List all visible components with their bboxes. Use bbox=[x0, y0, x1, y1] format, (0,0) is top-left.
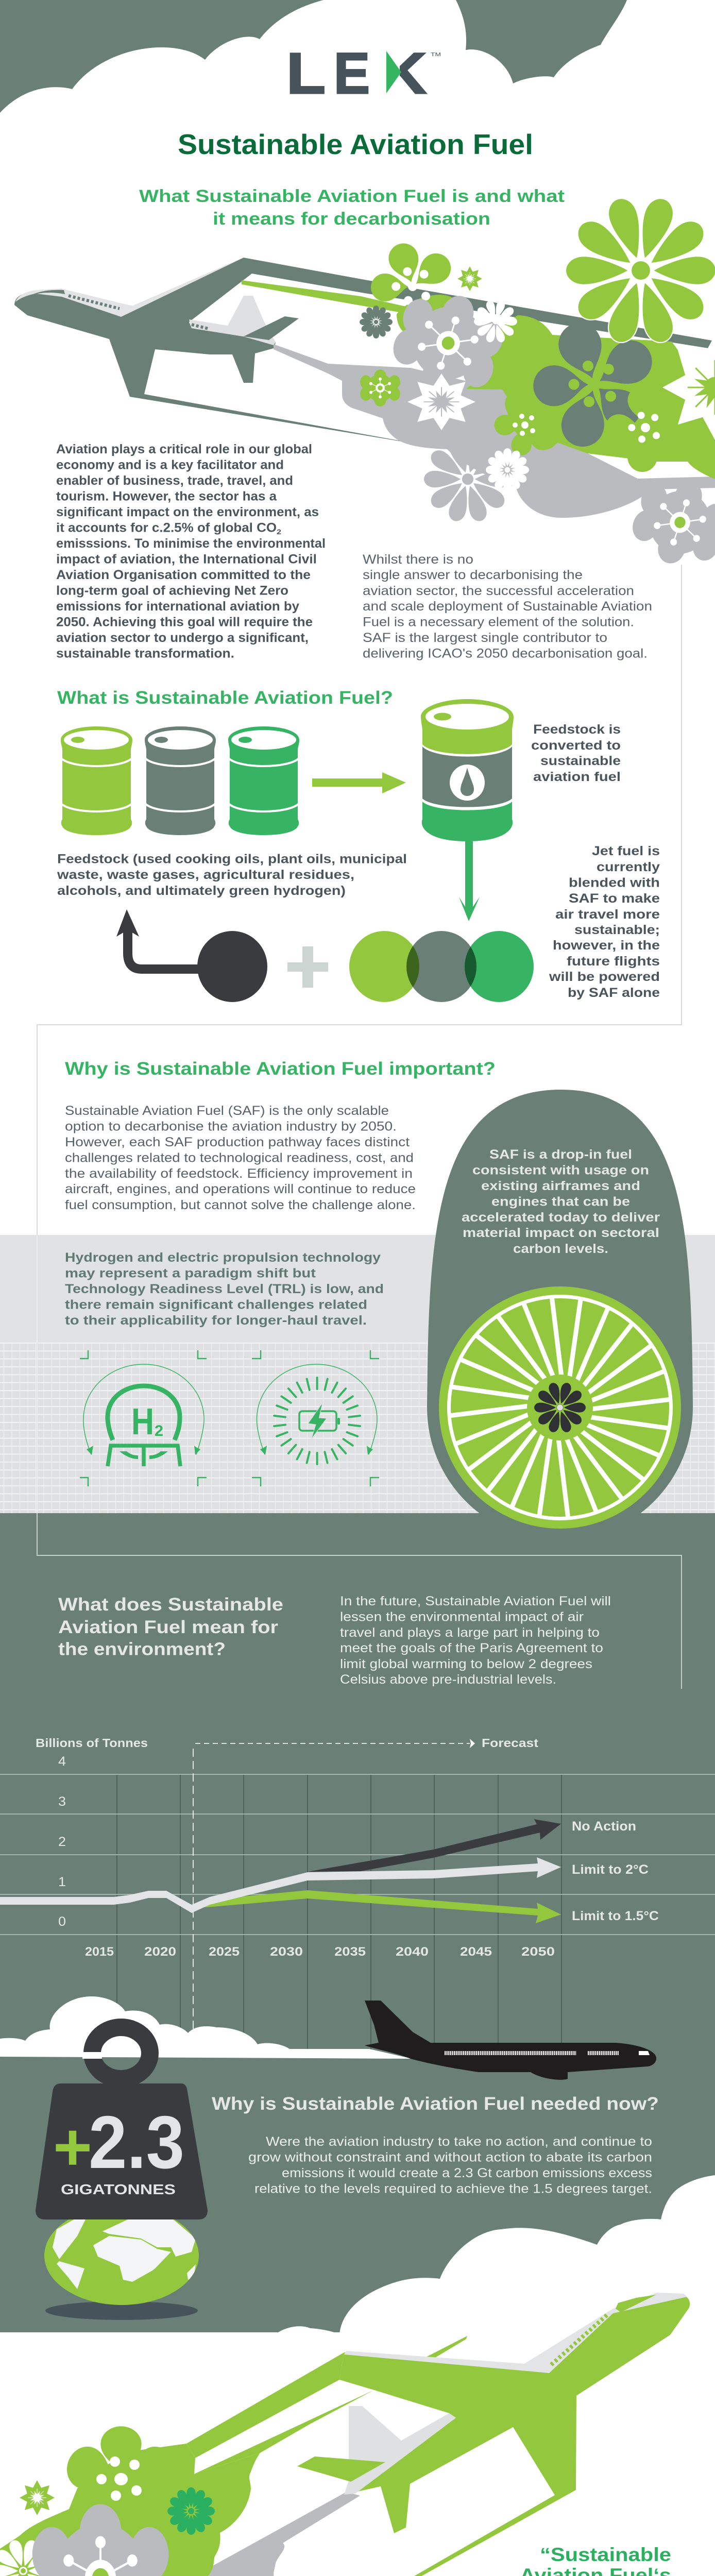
text: feedstock is converted bbox=[531, 722, 621, 784]
text block: intro left: 2 bbox=[277, 528, 281, 536]
battery circular arrows bbox=[257, 1364, 377, 1454]
icon: three feedstock barrels bbox=[61, 726, 299, 835]
chart x labels bbox=[85, 1945, 555, 1959]
plane stabiliser bbox=[297, 2456, 385, 2482]
frame line in green section bbox=[37, 1513, 682, 1689]
text: jet fuel: by SAF alone bbox=[568, 986, 660, 1000]
icon: weight and globe bbox=[36, 2027, 208, 2320]
dome text: SAF is a drop-in fuel bbox=[489, 1147, 632, 1162]
text block: environment: In the future, Sustainable Aviation Fuel will bbox=[340, 1594, 611, 1608]
chart x labels: 2035 bbox=[334, 1945, 366, 1959]
text block: intro left: long-term goal of achieving Net Zero bbox=[56, 583, 288, 598]
text block: why important: the availability of feedstock. Efficiency improvement in bbox=[65, 1166, 413, 1181]
globe shadow bbox=[45, 2301, 198, 2320]
chart forecast divider bbox=[193, 1749, 194, 2032]
text block: intro left: impact of aviation, the International Civil bbox=[56, 552, 317, 567]
text: jet fuel: blended with bbox=[569, 876, 660, 890]
engine outer ring bbox=[427, 1275, 693, 1540]
hydrogen stand bbox=[108, 1446, 180, 1466]
logo: LEK: TM bbox=[431, 52, 441, 58]
chart y labels: 1 bbox=[58, 1875, 66, 1889]
engine fan bbox=[439, 1286, 681, 1529]
plane cockpit bbox=[616, 2295, 656, 2312]
text block: intro left: enabler of business, trade, travel, and bbox=[56, 473, 293, 488]
text block: intro left: 2050. Achieving this goal will require the bbox=[56, 615, 313, 630]
text block: why important: However, each SAF production pathway faces distinct bbox=[65, 1135, 410, 1149]
flower: white grey daisy bbox=[486, 448, 529, 492]
subtitle: What Sustainable Aviation Fuel is and what bbox=[139, 187, 565, 206]
panel: dark green lower section bbox=[0, 1513, 715, 2332]
heading: why needed now: Why is Sustainable Aviation Fuel needed now? bbox=[212, 2094, 659, 2114]
battery ring of ticks bbox=[274, 1378, 360, 1464]
flower: lime clover upper left bbox=[370, 240, 457, 305]
plane main body bbox=[187, 2297, 690, 2576]
flower: grey daisy bbox=[424, 435, 512, 523]
plane tail fin bbox=[344, 2406, 456, 2495]
text: feedstock list: alcohols, and ultimately green hydrogen) bbox=[57, 884, 346, 898]
chart x labels: 2025 bbox=[209, 1945, 240, 1959]
text block: environment bbox=[340, 1594, 611, 1687]
chart vertical grid bbox=[117, 1774, 561, 2053]
weight block bbox=[36, 2083, 208, 2219]
quote: “Sustainable bbox=[540, 2544, 671, 2565]
flower: large white star bbox=[662, 335, 715, 440]
weight figure: GIGATONNES bbox=[61, 2181, 176, 2197]
grey cloud bbox=[274, 344, 715, 518]
chart labels bbox=[572, 1819, 659, 1923]
lime cloud lower bbox=[0, 2444, 260, 2576]
section frame line bbox=[37, 565, 682, 1689]
text block: intro left: Aviation plays a critical role in our global bbox=[56, 442, 312, 456]
text block: hydrogen bbox=[65, 1250, 384, 1328]
weight figure bbox=[53, 2100, 184, 2197]
flower: top lime clover bbox=[61, 2426, 181, 2501]
text block: intro right: SAF is the largest single contributor to bbox=[363, 631, 607, 645]
flower: small lime blossom bbox=[360, 369, 400, 406]
chart x labels: 2040 bbox=[396, 1945, 429, 1959]
heading: what is SAF: What is Sustainable Aviation Fuel? bbox=[57, 688, 393, 708]
chart forecast arrow bbox=[195, 1743, 470, 1744]
white contrail cloud bbox=[0, 1996, 412, 2059]
text block: why needed now: emissions it would create a 2.3 Gt carbon emissions excess bbox=[282, 2166, 652, 2180]
panel: grey band with grid bbox=[0, 1235, 715, 1513]
text block: why needed now: grow without constraint and without action to abate its carbon bbox=[248, 2150, 652, 2165]
lime cloud left bbox=[397, 295, 456, 335]
text block: why needed now: Were the aviation industry to take no action, and continue to bbox=[266, 2134, 652, 2149]
flower: dark daisy bbox=[360, 306, 393, 338]
text block: intro right: delivering ICAO's 2050 decarbonisation goal. bbox=[363, 646, 648, 660]
text: feedstock is converted: aviation fuel bbox=[533, 770, 621, 784]
chart x labels: 2030 bbox=[270, 1945, 303, 1959]
text block: intro right: Whilst there is no bbox=[363, 552, 473, 567]
text block: intro left: it accounts for c.2.5% of global CO bbox=[56, 520, 277, 535]
flower: large grey blossom bbox=[32, 2504, 168, 2576]
text block: intro left: economy and is a key facilitator and bbox=[56, 458, 284, 472]
dome text bbox=[462, 1147, 660, 1256]
text block: environment: lessen the environmental impact of air bbox=[340, 1609, 584, 1624]
chart axis title: Billions of Tonnes bbox=[36, 1736, 148, 1750]
text block: hydrogen: Technology Readiness Level (TRL) is low, and bbox=[65, 1282, 384, 1296]
arrow: SAF down to blend bbox=[459, 841, 480, 921]
dome text: carbon levels. bbox=[513, 1242, 608, 1256]
hydrogen symbol: H bbox=[131, 1401, 154, 1443]
hydrogen dome bbox=[108, 1386, 180, 1440]
heading: what does SAF mean bbox=[58, 1595, 283, 1659]
chart y labels bbox=[58, 1754, 66, 1929]
text block: environment: limit global warming to below 2 degrees bbox=[340, 1657, 592, 1671]
chart y labels: 4 bbox=[58, 1754, 66, 1769]
lime wing stripe bbox=[242, 280, 417, 315]
subtitle bbox=[139, 187, 565, 229]
logo: LEK: E bbox=[334, 41, 370, 106]
icon: overlapping feedstock circles bbox=[349, 931, 534, 1002]
text block: why needed now: relative to the levels required to achieve the 1.5 degrees target. bbox=[254, 2181, 652, 2196]
flower: dark clover bbox=[533, 317, 660, 452]
text block: hydrogen: there remain significant challenges related bbox=[65, 1297, 367, 1312]
dome text: material impact on sectoral bbox=[463, 1226, 659, 1240]
plane fuselage highlights bbox=[15, 258, 244, 317]
icon: plus bbox=[287, 946, 328, 988]
chart labels: Limit to 1.5°C bbox=[572, 1909, 659, 1923]
plane windows bbox=[551, 2313, 609, 2365]
flower: small lime blossom bbox=[192, 2576, 246, 2577]
flower: small lime star bbox=[20, 2480, 55, 2515]
flower: white daisy bbox=[474, 300, 517, 343]
lime cloud bbox=[466, 315, 715, 479]
plane stabiliser bbox=[244, 316, 299, 340]
heading: why important: Why is Sustainable Aviation Fuel important? bbox=[65, 1059, 496, 1079]
grey cloud lower bbox=[0, 2492, 360, 2576]
plane windows bbox=[69, 296, 209, 329]
dome text: engines that can be bbox=[491, 1194, 630, 1209]
plane tail band windows bbox=[432, 2426, 451, 2444]
plane tail fin bbox=[189, 296, 276, 345]
plane: black side view bbox=[365, 2001, 656, 2080]
text: jet fuel: air travel more bbox=[555, 907, 660, 922]
text: feedstock list: Feedstock (used cooking oils, plant oils, municipal bbox=[57, 852, 407, 867]
plane wing strips bbox=[186, 2336, 467, 2474]
text: feedstock is converted: sustainable bbox=[540, 754, 621, 768]
dome text: existing airframes and bbox=[481, 1179, 640, 1193]
text block: intro right bbox=[363, 552, 652, 660]
text block: environment: travel and plays a large part in helping to bbox=[340, 1625, 600, 1640]
text block: why important: challenges related to technological readiness, cost, and bbox=[65, 1151, 414, 1165]
icon: dark fuel circle bbox=[197, 931, 267, 1002]
text block: environment: Celsius above pre-industrial levels. bbox=[340, 1672, 556, 1687]
text block: intro left: emisssions. To minimise the environmental bbox=[56, 536, 326, 551]
text block: hydrogen: Hydrogen and electric propulsion technology bbox=[65, 1250, 381, 1265]
chart x labels: 2015 bbox=[85, 1945, 114, 1959]
text block: why important: option to decarbonise the aviation industry by 2050. bbox=[65, 1119, 397, 1133]
chart: emissions trajectories: Forecast bbox=[482, 1736, 538, 1750]
text block: intro right: Fuel is a necessary element of the solution. bbox=[363, 615, 634, 630]
barrel: grey-green bbox=[145, 726, 216, 835]
text block: intro left: Aviation Organisation committed to the bbox=[56, 568, 311, 582]
logo: LEK: K bbox=[382, 41, 427, 106]
text block: intro left: sustainable transformation. bbox=[56, 646, 234, 660]
globe bbox=[44, 2219, 199, 2305]
weight ring bbox=[92, 2027, 150, 2079]
white cloud bottom section bbox=[0, 2175, 715, 2576]
flower: white star bbox=[407, 374, 475, 430]
text block: why important: Sustainable Aviation Fuel (SAF) is the only scalable bbox=[65, 1104, 389, 1118]
chart y labels: 2 bbox=[58, 1835, 66, 1849]
chart y labels: 3 bbox=[58, 1794, 66, 1809]
logo: LEK: L bbox=[286, 41, 326, 106]
text block: intro right: single answer to decarbonising the bbox=[363, 568, 583, 582]
text block: hydrogen: may represent a paradigm shift but bbox=[65, 1266, 316, 1281]
text: jet fuel: future flights bbox=[567, 954, 660, 969]
subtitle: it means for decarbonisation bbox=[213, 209, 490, 229]
text: jet fuel: currently bbox=[597, 860, 660, 874]
header cloud sky bbox=[0, 0, 627, 113]
chart x labels: 2020 bbox=[144, 1945, 176, 1959]
text: jet fuel: sustainable; bbox=[574, 923, 660, 937]
battery body bbox=[299, 1411, 336, 1431]
text block: why needed now bbox=[248, 2134, 652, 2196]
text: jet fuel: will be powered bbox=[549, 970, 660, 984]
chart labels: No Action bbox=[572, 1819, 636, 1834]
chart horizontal grid bbox=[0, 1774, 715, 1935]
text: jet fuel bbox=[549, 844, 660, 1000]
text: jet fuel: Jet fuel is bbox=[592, 844, 660, 858]
chart x labels: 2050 bbox=[521, 1945, 555, 1959]
text block: why important: fuel consumption, but cannot solve the challenge alone. bbox=[65, 1198, 416, 1212]
arrow: feedstock to SAF bbox=[312, 772, 406, 793]
plane windows bbox=[445, 2051, 619, 2055]
text block: environment: meet the goals of the Paris Agreement to bbox=[340, 1641, 603, 1655]
battery corner marks bbox=[252, 1350, 379, 1486]
chart x labels: 2045 bbox=[460, 1945, 492, 1959]
plane wing bbox=[14, 258, 715, 445]
hydrogen circular arrows bbox=[83, 1364, 204, 1454]
text block: intro left: aviation sector to undergo a significant, bbox=[56, 631, 309, 645]
heading: what does SAF mean: What does Sustainable bbox=[58, 1595, 283, 1615]
flower: small lime clover bbox=[495, 414, 535, 457]
logo: LEK bbox=[286, 41, 441, 106]
text block: intro left: significant impact on the environment, as bbox=[56, 505, 319, 519]
panel: SAF drop-in dome bbox=[427, 1090, 693, 1540]
text block: intro right: aviation sector, the successful acceleration bbox=[363, 584, 634, 598]
text: jet fuel: however, in the bbox=[553, 938, 660, 953]
battery bolt bbox=[308, 1403, 327, 1439]
text block: why important: aircraft, engines, and operations will continue to reduce bbox=[65, 1182, 416, 1196]
text block: intro left: tourism. However, the sector has a bbox=[56, 489, 277, 504]
flower: grey blossom bbox=[384, 281, 512, 405]
icon: large SAF barrel bbox=[421, 699, 514, 841]
text block: hydrogen: to their applicability for longer-haul travel. bbox=[65, 1313, 367, 1328]
arrow: emissions return bbox=[116, 909, 203, 969]
text block: why important bbox=[65, 1104, 416, 1212]
flower: green daisy bbox=[167, 2487, 215, 2535]
plane cockpit bbox=[32, 290, 65, 295]
icon: hydrogen bbox=[80, 1350, 207, 1486]
text block: intro right: and scale deployment of Sustainable Aviation bbox=[363, 599, 652, 614]
plane top highlights bbox=[344, 2293, 687, 2373]
flower: grey blossom lower right bbox=[625, 468, 715, 577]
chart: emissions trajectories bbox=[0, 1736, 715, 2053]
chart line: limit to 1.5 bbox=[200, 1890, 561, 1923]
flower: lime clover right bbox=[605, 384, 698, 473]
chart line: no action bbox=[308, 1819, 561, 1872]
chart line: limit to 2 bbox=[0, 1857, 561, 1913]
heading: what does SAF mean: the environment? bbox=[58, 1639, 226, 1659]
chart y labels: 0 bbox=[58, 1914, 66, 1929]
weight figure: 2.3 bbox=[89, 2100, 184, 2184]
quote bbox=[253, 2544, 671, 2576]
chart labels: Limit to 2°C bbox=[572, 1862, 649, 1877]
icon: hydrogen: 2 bbox=[155, 1422, 163, 1439]
text block: intro left: emissions for international aviation by bbox=[56, 599, 299, 614]
hydrogen corner marks bbox=[80, 1350, 207, 1486]
text: jet fuel: SAF to make bbox=[569, 891, 660, 906]
flower: large lime daisy bbox=[566, 195, 715, 346]
flower: small lime star bbox=[457, 266, 482, 291]
text: feedstock list: waste, waste gases, agricultural residues, bbox=[57, 868, 354, 882]
title: Sustainable Aviation Fuel bbox=[178, 128, 533, 160]
dome text: consistent with usage on bbox=[472, 1163, 649, 1178]
illustration: grey-green plane with flowers bbox=[14, 195, 715, 577]
text: feedstock list bbox=[57, 852, 407, 898]
weight figure: + bbox=[53, 2109, 92, 2184]
barrel: lime bbox=[61, 726, 132, 835]
text: feedstock is converted: converted to bbox=[531, 738, 621, 753]
icon: battery bbox=[252, 1350, 379, 1486]
heading: what does SAF mean: Aviation Fuel mean for bbox=[58, 1617, 278, 1637]
barrel: green bbox=[228, 726, 299, 835]
text block: intro left bbox=[56, 442, 326, 660]
flower: white lime daisy bbox=[0, 2538, 55, 2576]
text: feedstock is converted: Feedstock is bbox=[533, 722, 621, 737]
illustration: lime plane with flowers bbox=[0, 2293, 690, 2576]
dome text: accelerated today to deliver bbox=[462, 1210, 660, 1225]
